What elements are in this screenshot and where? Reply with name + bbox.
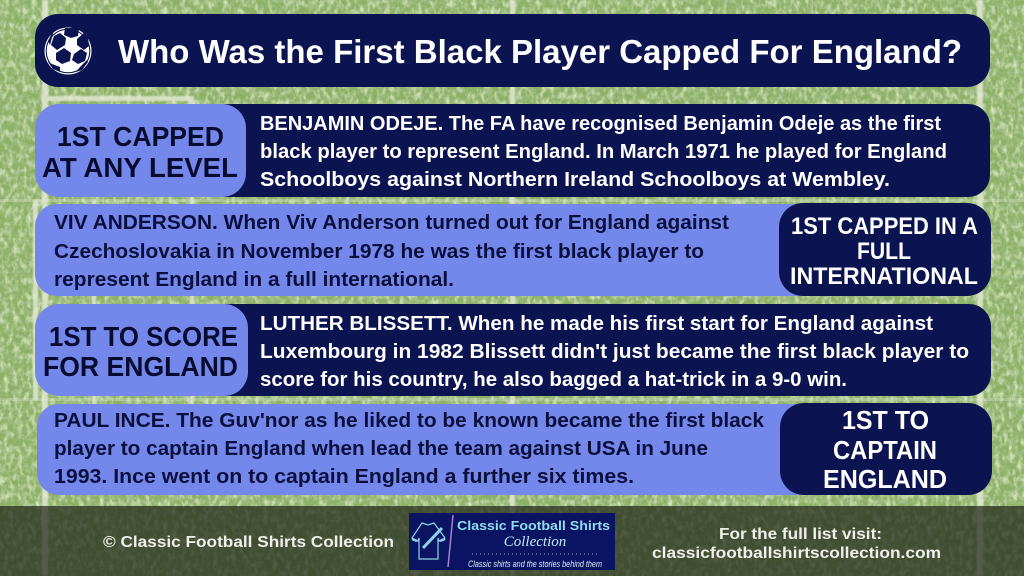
body text: Luther Blissett: Luxembourg in 1982 Blissett didn't just became the first black player to	[260, 341, 969, 363]
footer band	[0, 506, 1024, 576]
title text: Who Was the First Black Player Capped For England?	[118, 33, 962, 70]
panel: Luther Blissett	[35, 304, 991, 396]
body text: Luther Blissett: score for his country, he also bagged a hat-trick in a 9-0 win.	[260, 369, 847, 391]
body text: Luther Blissett: LUTHER BLISSETT. When he made his first start for England against	[260, 313, 933, 335]
body text: Luther Blissett	[260, 313, 969, 391]
body text: Paul Ince: player to captain England when lead the team against USA in June	[54, 438, 708, 460]
label: 1st capped at any level: 1ST CAPPED	[57, 121, 224, 152]
label: 1st capped in a full international: FULL	[857, 238, 911, 265]
website call to action: classicfootballshirtscollection.com	[652, 545, 941, 562]
body text: Viv Anderson: Czechoslovakia in November 1978 he was the first black player to	[54, 241, 704, 263]
body text: Benjamin Odeje: BENJAMIN ODEJE. The FA have recognised Benjamin Odeje as the first	[260, 113, 941, 135]
title banner	[35, 14, 990, 87]
label: 1st capped at any level: AT ANY LEVEL	[42, 152, 238, 183]
website call to action	[652, 526, 941, 562]
icon: shirt	[412, 523, 445, 559]
logo name: Classic Football Shirts	[457, 519, 610, 533]
label: 1st capped at any level	[35, 104, 246, 197]
logo tagline: Classic shirts and the stories behind them	[468, 559, 602, 569]
logo	[409, 513, 615, 570]
body text: Paul Ince: PAUL INCE. The Guv'nor as he liked to be known became the first black	[54, 410, 765, 432]
icon: football	[44, 28, 92, 74]
label: 1st capped in a full international	[779, 203, 991, 296]
body text: Paul Ince: 1993. Ince went on to captain England a further six times.	[54, 466, 634, 488]
body text: Viv Anderson: VIV ANDERSON. When Viv Anderson turned out for England against	[54, 212, 729, 234]
panel: Viv Anderson	[35, 203, 991, 296]
label: 1st to score for England: 1ST TO SCORE	[49, 321, 238, 352]
body text: Benjamin Odeje: black player to represent England. In March 1971 he played for England	[260, 141, 947, 163]
label: 1st to captain England: ENGLAND	[823, 464, 947, 494]
logo subname: Collection	[504, 534, 566, 550]
logo divider	[448, 515, 453, 567]
panel: Benjamin Odeje	[35, 104, 990, 197]
copyright text: © Classic Football Shirts Collection	[103, 534, 394, 551]
label: 1st to score for England: FOR ENGLAND	[43, 351, 238, 382]
label: 1st to captain England: CAPTAIN	[833, 435, 937, 465]
label: 1st to captain England: 1ST TO	[842, 405, 929, 435]
label: 1st capped in a full international: INTERNATIONAL	[790, 263, 978, 290]
panel: Paul Ince	[37, 403, 992, 495]
body text: Benjamin Odeje	[260, 113, 947, 191]
label: 1st to score for England	[35, 304, 248, 396]
label: 1st capped in a full international: 1ST CAPPED IN A	[791, 213, 978, 240]
body text: Benjamin Odeje: Schoolboys against Northern Ireland Schoolboys at Wembley.	[260, 169, 890, 191]
body text: Viv Anderson	[54, 212, 729, 291]
label: 1st to captain England	[780, 403, 992, 495]
body text: Paul Ince	[54, 410, 765, 488]
website call to action: For the full list visit:	[719, 526, 882, 543]
body text: Viv Anderson: represent England in a full international.	[54, 269, 454, 291]
